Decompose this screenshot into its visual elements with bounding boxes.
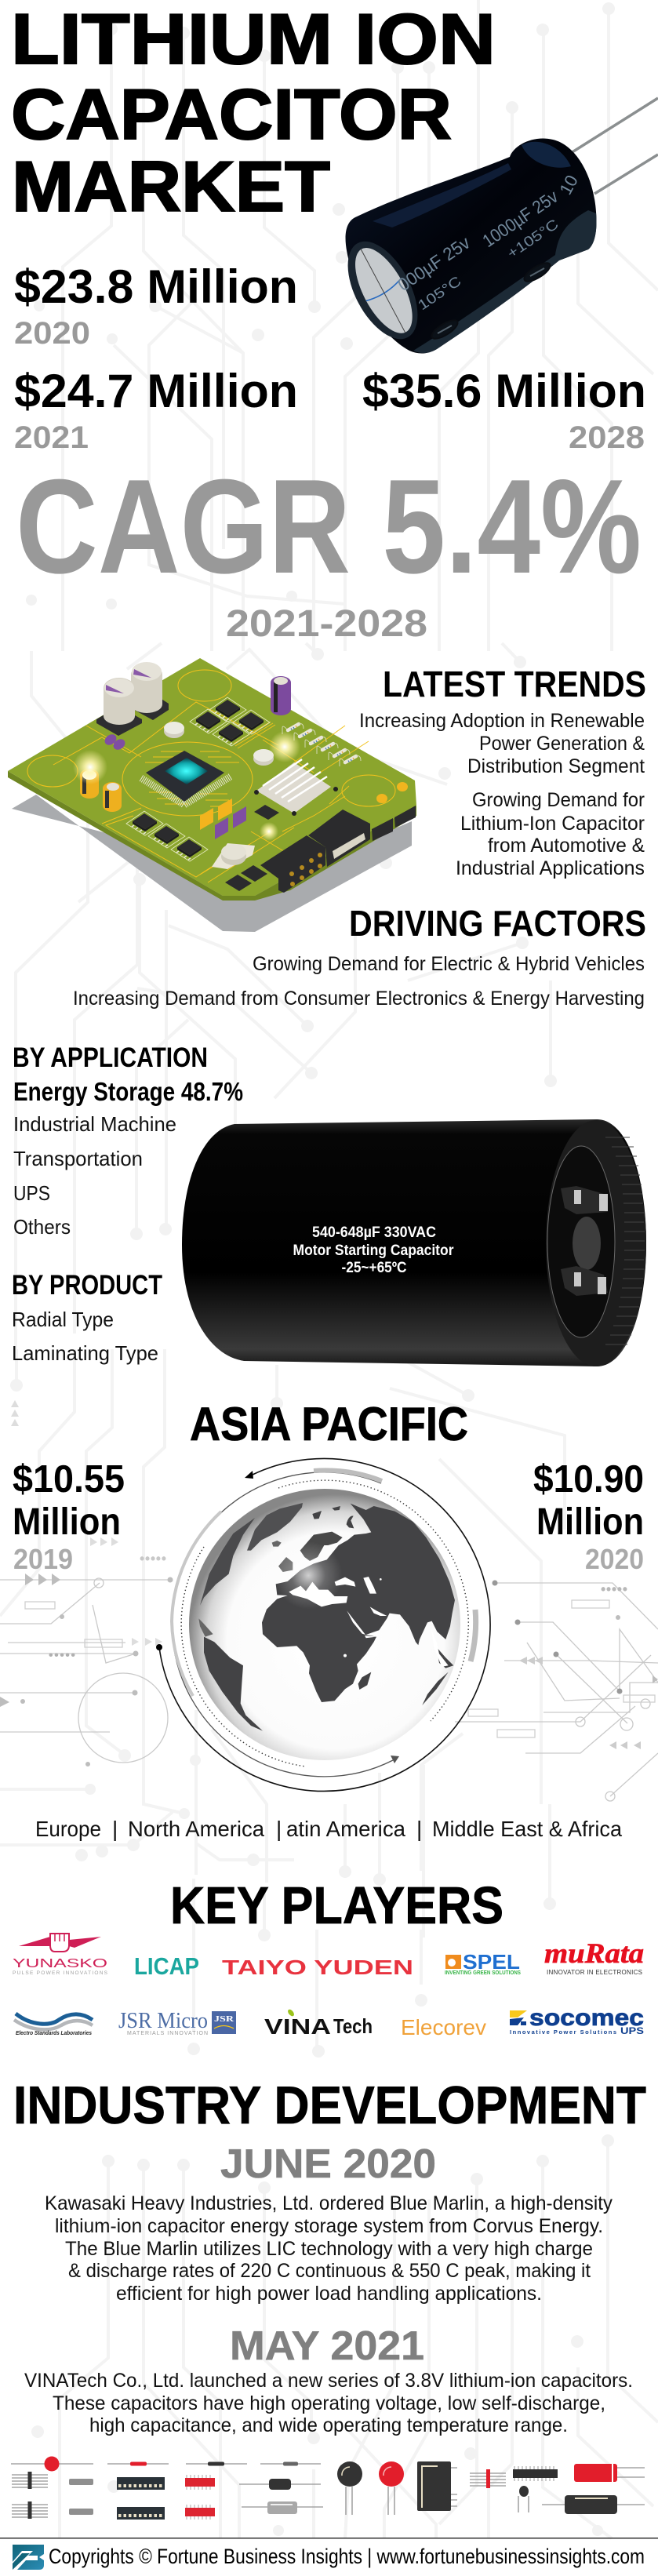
- development text: June 2020: efficient for high power load handling applications.: [116, 2283, 542, 2305]
- image: motor starting capacitor: Motor Starting Capacitor: [293, 1243, 454, 1259]
- other regions list: [35, 1817, 622, 1841]
- logo: JSR Micro: MATERIALS INNOVATION: [127, 2031, 208, 2036]
- stat: Asia Pacific 2019: [13, 1458, 125, 1575]
- segment: by application: Transportation: [13, 1147, 143, 1170]
- development text: June 2020: Kawasaki Heavy Industries, Ltd. ordered Blue Marlin, a high-density: [45, 2192, 613, 2214]
- section: latest trends: Power Generation &: [479, 733, 645, 755]
- section: latest trends: from Automotive &: [488, 835, 645, 857]
- development text: June 2020: & discharge rates of 220 C continuous & 550 C peak, making it: [68, 2260, 591, 2282]
- development text: June 2020: lithium-ion capacitor energy storage system from Corvus Energy.: [55, 2215, 603, 2237]
- logo: JSR Micro: JSR Micro: [118, 2008, 208, 2033]
- continents: [198, 1503, 455, 1731]
- background tech dots and triangles: [0, 1400, 658, 1766]
- logo: Murata: muRata: [544, 1937, 644, 1969]
- other regions list: atin America: [286, 1817, 405, 1841]
- logo: LICAP: LICAP: [134, 1952, 199, 1980]
- heading: key players: KEY PLAYERS: [170, 1876, 503, 1935]
- logo: Socomec: [510, 2005, 644, 2036]
- stat: 2028 market value: [362, 365, 646, 455]
- image: electrolytic capacitor: 1000µF 25v: [478, 186, 562, 251]
- title: MARKET: [12, 147, 330, 227]
- other regions list: |: [276, 1817, 282, 1841]
- development text: June 2020: [45, 2192, 613, 2305]
- stat: 2020 market value: [14, 260, 298, 351]
- stat: 2020 market value: 2020: [14, 316, 90, 351]
- image: electrolytic capacitor: 10: [555, 172, 582, 198]
- seas: [289, 1577, 449, 1667]
- logo: Yunasko: PULSE POWER INNOVATIONS: [13, 1970, 108, 1976]
- logo: Socomec: Innovative Power Solutions: [510, 2028, 616, 2036]
- sparks: [73, 731, 300, 841]
- segment: by application: UPS: [13, 1181, 50, 1205]
- section: latest trends: Lithium-Ion Capacitor: [460, 813, 645, 835]
- logo: SPEL: SPEL: [463, 1950, 520, 1974]
- other regions list: North America: [128, 1817, 264, 1841]
- logo: Electro Standards Laboratories: Electro Standards Laboratories: [16, 2031, 92, 2036]
- development text: May 2021: high capacitance, and wide operating temperature range.: [89, 2414, 568, 2436]
- section: latest trends: Industrial Applications: [456, 857, 645, 879]
- background tech dots and triangles: •••••: [140, 1551, 166, 1566]
- yellow traces: [27, 670, 395, 882]
- stat: Asia Pacific 2019: Million: [13, 1501, 121, 1543]
- segment: by application: [13, 1042, 243, 1239]
- outer orbit arrow: [156, 1458, 490, 1791]
- section: driving factors: Growing Demand for Electric & Hybrid Vehicles: [253, 953, 645, 975]
- image: electrolytic capacitor: +105°C: [504, 216, 562, 261]
- segment: by product: Laminating Type: [12, 1341, 158, 1365]
- IC chips: [126, 697, 279, 891]
- logo: Electro Standards Laboratories: [14, 2014, 93, 2036]
- image: motor starting capacitor: 540-648µF 330VAC: [312, 1224, 436, 1241]
- illustration: circuit board: [8, 658, 416, 932]
- segment: by application: BY APPLICATION: [13, 1042, 208, 1073]
- stat: 2020 market value: $23.8 Million: [14, 260, 298, 313]
- icon: Fortune Business Insights logo: [13, 2545, 44, 2570]
- section: latest trends: Growing Demand for: [472, 789, 645, 811]
- development date: June 2020: JUNE 2020: [220, 2141, 436, 2187]
- stat: Asia Pacific 2020: [533, 1458, 644, 1575]
- section: latest trends: [359, 664, 646, 879]
- stat: Asia Pacific 2020: Million: [536, 1501, 644, 1543]
- inner orbit arrow: [172, 1470, 476, 1777]
- image: electrolytic capacitor: 105°C: [415, 273, 464, 313]
- logo: SPEL: [445, 1950, 521, 1976]
- connectors: [260, 806, 416, 893]
- chip: [141, 751, 231, 805]
- logo: Elecorev: Elecorev: [401, 2015, 486, 2039]
- logo: JSR Micro: JSR: [214, 2014, 234, 2024]
- section: latest trends: Increasing Adoption in Renewable: [359, 710, 645, 732]
- icon: globe with orbit rings: [156, 1458, 490, 1791]
- transistor can: [212, 843, 255, 869]
- other regions list: Middle East & Africa: [432, 1817, 622, 1841]
- section: driving factors: Increasing Demand from Consumer Electronics & Energy Harvesting: [73, 988, 645, 1010]
- development text: May 2021: VINATech Co., Ltd. launched a new series of 3.8V lithium-ion capacitors.: [24, 2370, 633, 2392]
- other regions list: |: [112, 1817, 118, 1841]
- CAGR period: 2021-2028: [226, 603, 427, 645]
- heat sink: [254, 759, 338, 816]
- image: electrolytic capacitor: 000µF 25v: [394, 232, 474, 295]
- electronic components strip: [11, 2457, 645, 2520]
- logo: Yunasko: [13, 1934, 108, 1976]
- section: latest trends: Distribution Segment: [467, 755, 645, 777]
- dotted rings: [181, 1480, 468, 1766]
- other regions list: |: [416, 1817, 422, 1841]
- stat: Asia Pacific 2019: $10.55: [13, 1458, 125, 1501]
- title: CAPACITOR: [11, 75, 452, 155]
- segment: by application: Industrial Machine: [13, 1112, 176, 1136]
- segment: by product: BY PRODUCT: [12, 1270, 162, 1301]
- highlight glow: [274, 1541, 343, 1610]
- segment: by product: Radial Type: [12, 1308, 114, 1331]
- segment: by product: [12, 1270, 162, 1365]
- stat: Asia Pacific 2019: 2019: [13, 1543, 73, 1575]
- stat: 2028 market value: $35.6 Million: [362, 365, 646, 417]
- logo: VINATech: Tech: [333, 2014, 373, 2038]
- development text: May 2021: These capacitors have high operating voltage, low self-discharge,: [53, 2392, 605, 2414]
- image: motor starting capacitor: -25~+65ºC: [342, 1260, 407, 1276]
- heading: Asia Pacific: ASIA PACIFIC: [190, 1398, 468, 1450]
- segment: by application: Others: [13, 1215, 71, 1239]
- stat: 2021 market value: $24.7 Million: [14, 365, 298, 417]
- logo: VINATech: [264, 2008, 373, 2039]
- logo: Socomec: UPS: [620, 2025, 644, 2036]
- title: LITHIUM ION: [11, 0, 496, 79]
- development date: May 2021: MAY 2021: [230, 2323, 424, 2369]
- logo: Murata: INNOVATOR IN ELECTRONICS: [547, 1969, 642, 1976]
- image: electrolytic capacitor: [333, 98, 658, 354]
- logo: Socomec: socomec: [529, 2005, 644, 2031]
- background tech dots and triangles: •••••: [601, 1581, 627, 1597]
- background tech lines around globe: [0, 1578, 658, 1801]
- section: driving factors: [73, 903, 646, 1010]
- stat: 2021 market value: 2021: [14, 420, 89, 455]
- segment: by application: Energy Storage 48.7%: [13, 1077, 243, 1106]
- development text: May 2021: [24, 2370, 633, 2436]
- stat: Asia Pacific 2020: $10.90: [533, 1458, 644, 1501]
- logo: SPEL: INVENTING GREEN SOLUTIONS: [445, 1969, 521, 1976]
- stat: Asia Pacific 2020: 2020: [585, 1543, 644, 1575]
- logo: Yunasko: YUNASKO: [13, 1957, 107, 1970]
- resistors: [282, 724, 361, 766]
- stat: 2021 market value: [14, 365, 298, 455]
- development text: June 2020: The Blue Marlin utilizes LIC technology with a very high charge: [65, 2238, 593, 2260]
- image: motor starting capacitor: [182, 1119, 646, 1366]
- background tech dots and triangles: •••••: [49, 1649, 75, 1662]
- stat: 2028 market value: 2028: [569, 420, 645, 455]
- other regions list: Europe: [35, 1817, 101, 1841]
- logo: VINATech: VINA: [264, 2014, 331, 2039]
- logo: Taiyo Yuden: TAIYO YUDEN: [222, 1956, 413, 1979]
- title: [11, 0, 496, 227]
- capacitors on board: [80, 662, 408, 839]
